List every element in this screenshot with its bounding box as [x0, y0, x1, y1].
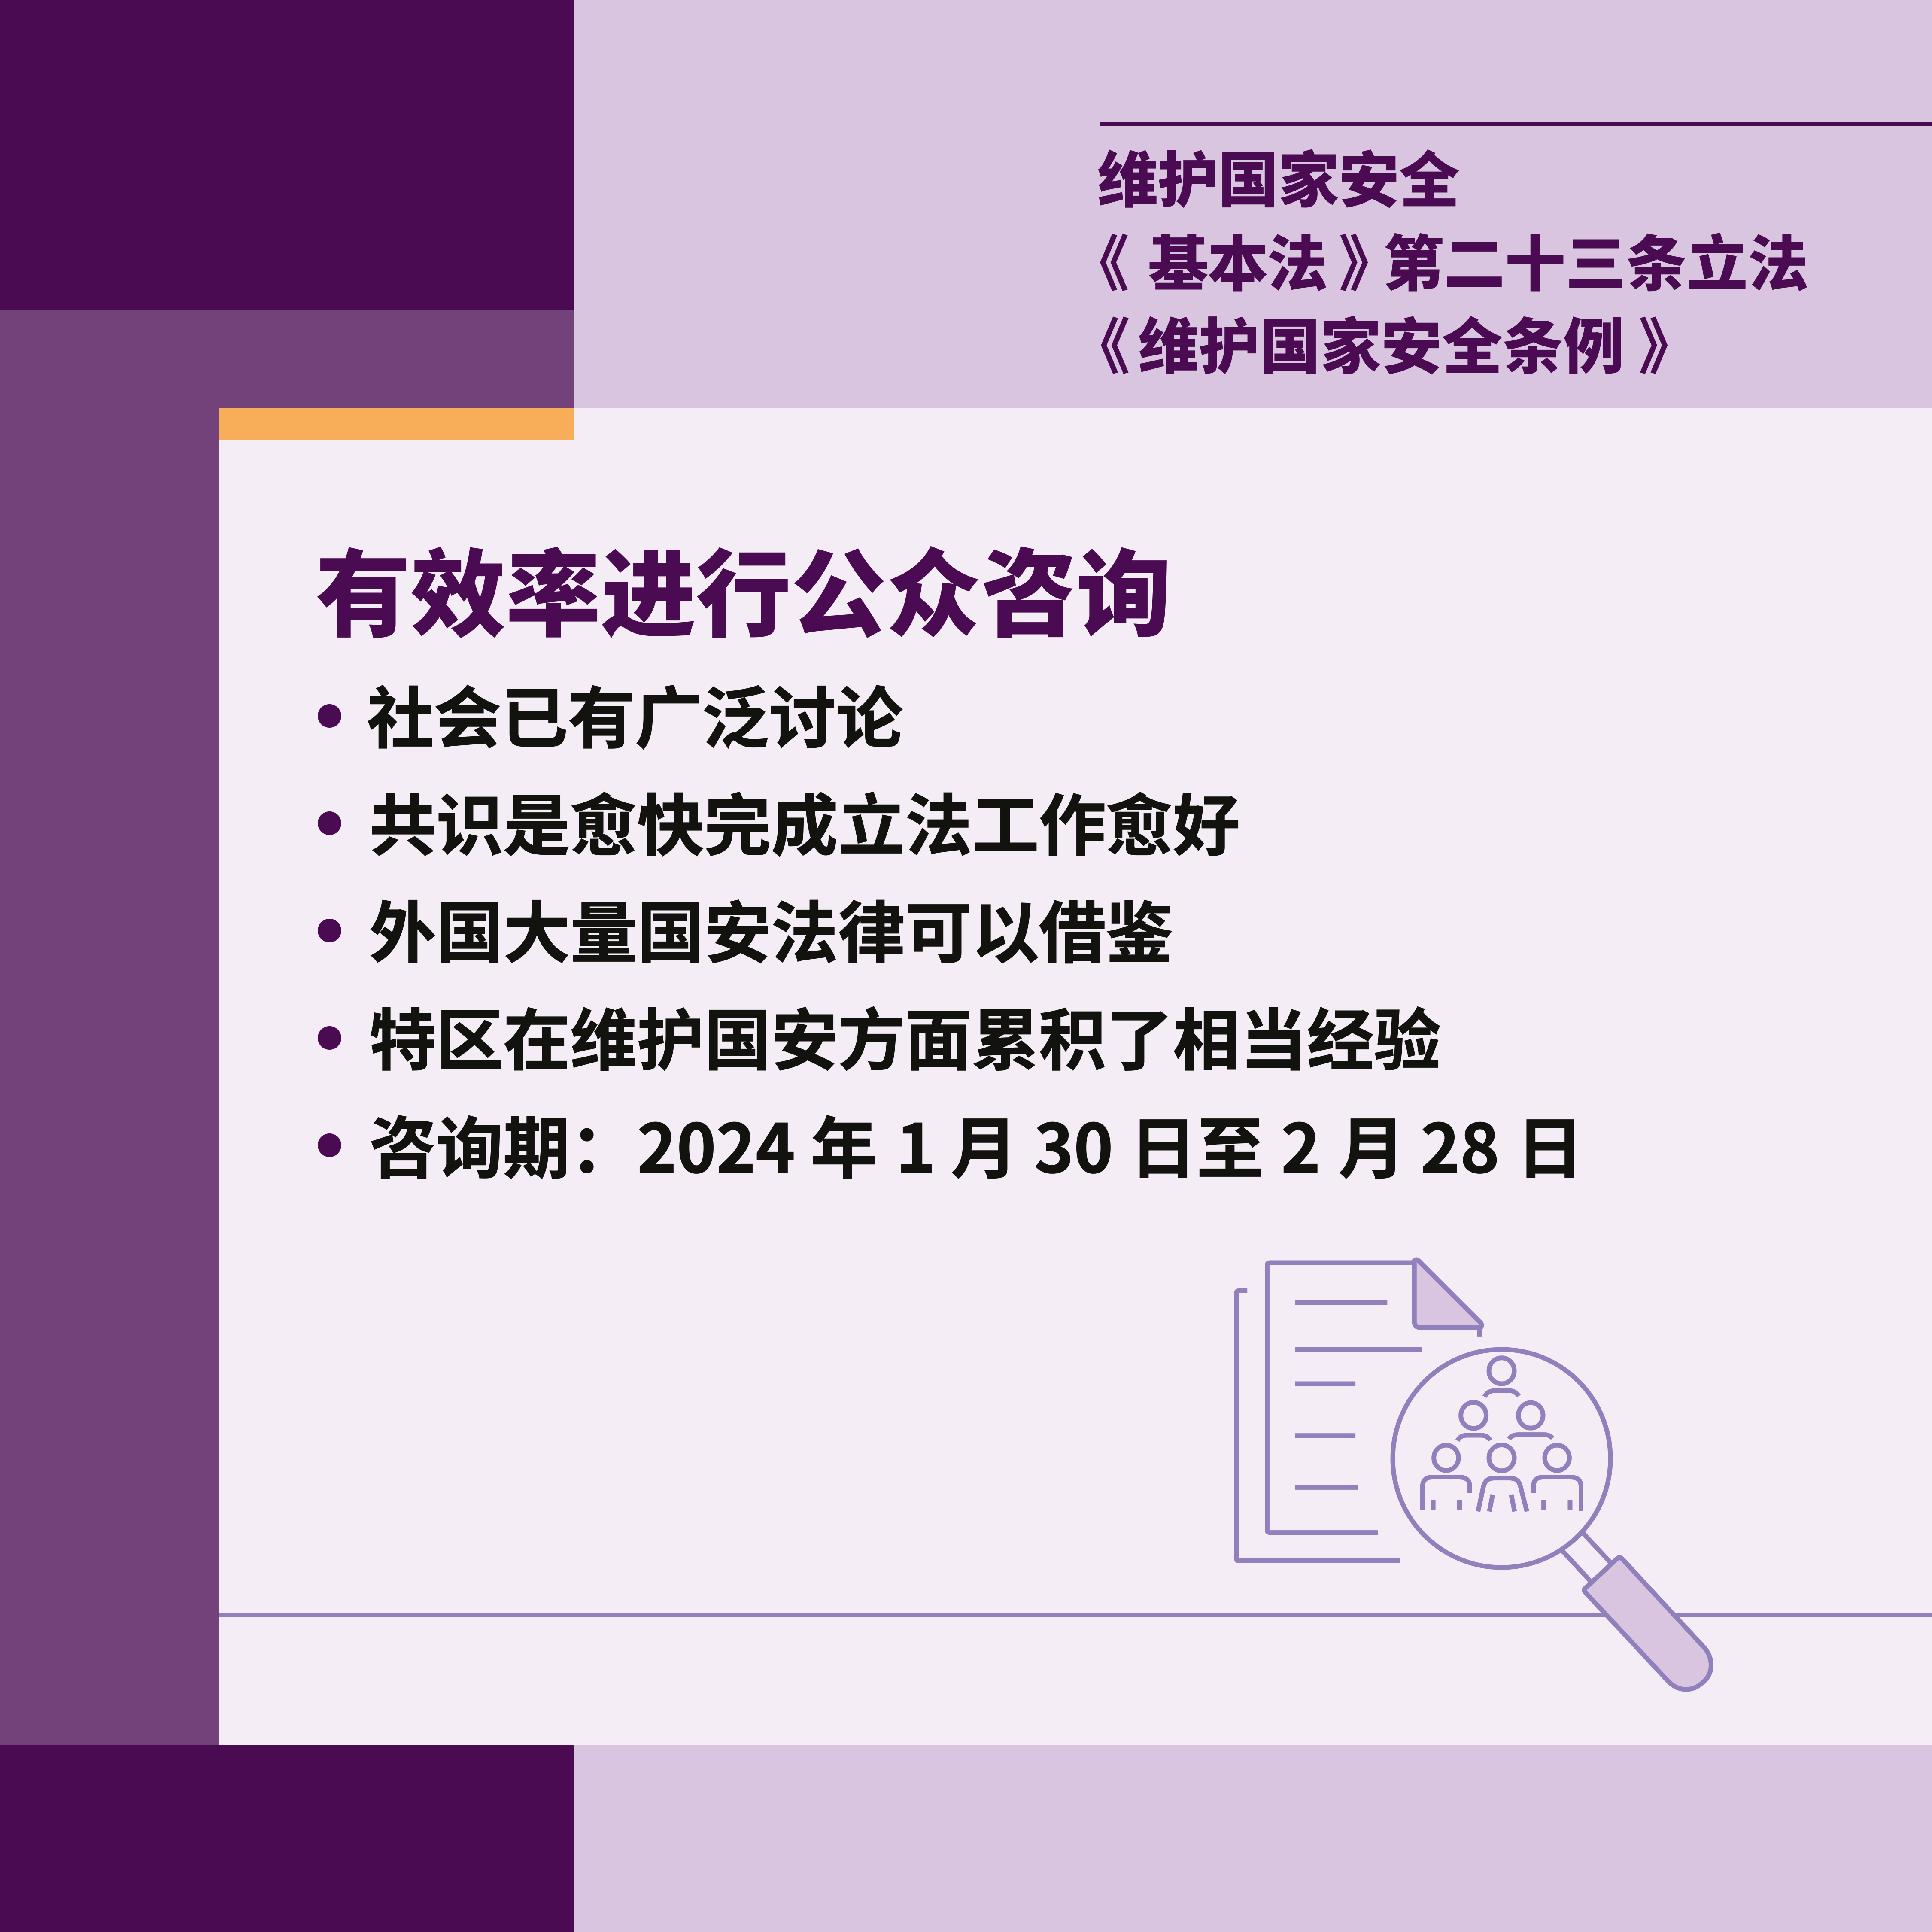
icon: document under magnifying glass with people	[1202, 1236, 1739, 1709]
top-left dark block	[0, 0, 574, 310]
header text: 《	[1069, 215, 1129, 303]
back page outline	[1236, 1291, 1400, 1561]
group of people	[1422, 1358, 1581, 1511]
bullet dot 2	[318, 811, 341, 835]
header text: 》	[1339, 215, 1400, 303]
header text: 基本法	[1148, 215, 1327, 303]
header text: 维护国家安全	[1097, 131, 1459, 219]
bullet text 1: 社会已有广泛讨论	[367, 665, 903, 762]
header text: 《	[1069, 298, 1130, 386]
bullet dot 1	[318, 704, 341, 728]
magnifier lens	[1393, 1349, 1610, 1567]
bullet list	[313, 665, 1601, 1194]
baseline rule	[219, 1613, 1932, 1617]
front page outline	[1267, 1263, 1414, 1533]
folded corner	[1414, 1260, 1482, 1327]
header text	[1073, 134, 1846, 391]
bullet dot 5	[318, 1133, 341, 1157]
bullet dot 3	[318, 919, 341, 942]
mid purple band	[0, 310, 574, 408]
panel heading: 有效率进行公众咨询	[316, 518, 1171, 656]
bullet dot 4	[318, 1026, 341, 1050]
header text: 维护国家安全条例	[1138, 298, 1624, 386]
bullet text 5: 咨询期：2024 年 1 月 30 日至 2 月 28 日	[369, 1095, 1583, 1192]
orange accent bar	[219, 408, 574, 440]
main content panel	[219, 408, 1932, 1745]
header rule	[1100, 122, 1932, 126]
bullet text 4: 特区在维护国安方面累积了相当经验	[369, 987, 1441, 1084]
handle connector	[1562, 1533, 1611, 1581]
page text lines	[1295, 1303, 1422, 1487]
header text: 第二十三条立法	[1383, 215, 1808, 303]
bottom-left dark block	[0, 1745, 574, 1932]
left purple column	[0, 408, 219, 1745]
bullet text 3: 外国大量国安法律可以借鉴	[369, 879, 1173, 976]
header text: 》	[1638, 298, 1699, 386]
magnifier handle	[1584, 1558, 1711, 1689]
bullet text 2: 共识是愈快完成立法工作愈好	[369, 772, 1240, 869]
fold tick	[1477, 1327, 1482, 1337]
